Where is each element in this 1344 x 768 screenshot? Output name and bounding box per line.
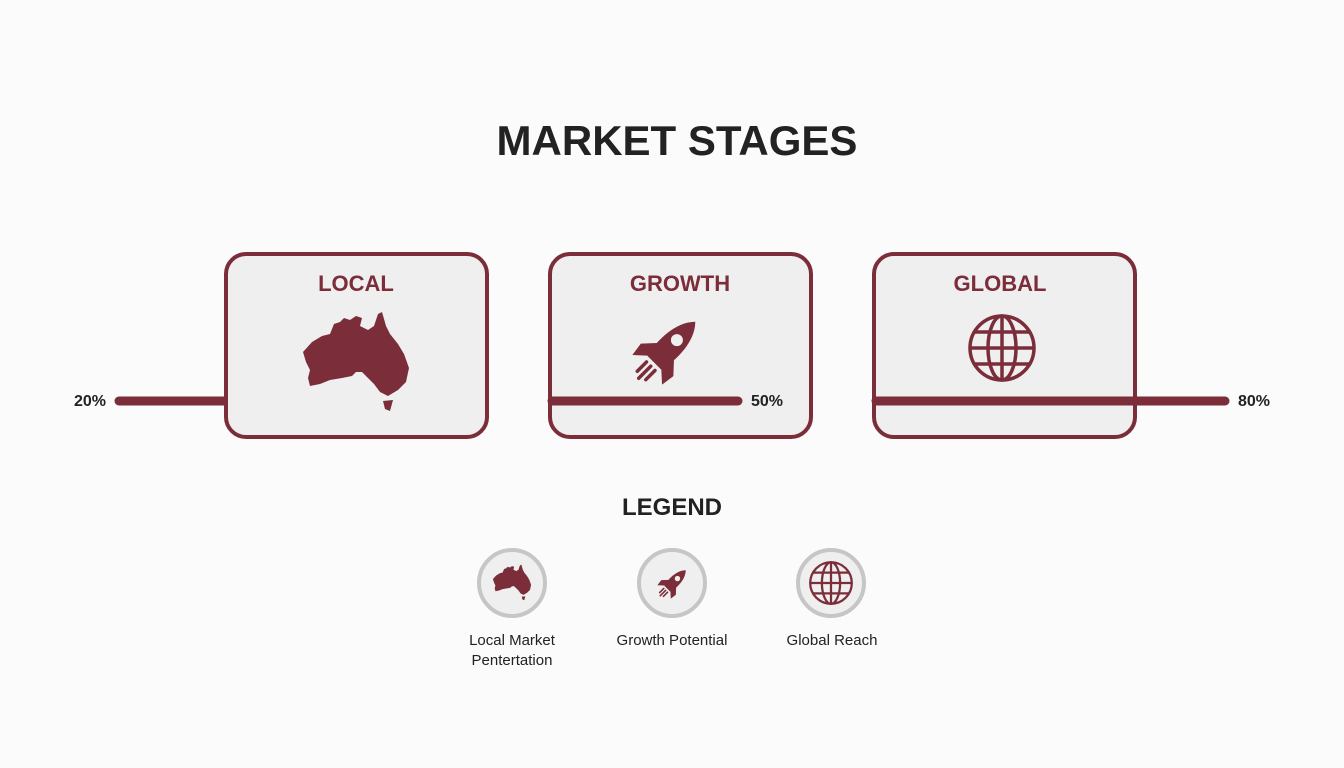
panel: global: GLOBAL (954, 271, 1046, 296)
panel: growth: 50% (751, 393, 783, 410)
legend item: growth: Growth Potential (617, 632, 727, 649)
panel: growth: GROWTH (630, 271, 730, 296)
legend item: local: Local Market (469, 632, 556, 649)
panel: global (874, 254, 1270, 437)
progress bar: local 20%: 20% (74, 393, 106, 410)
panel: growth (550, 254, 811, 437)
panel: local (226, 254, 487, 437)
legend heading: LEGEND (622, 494, 722, 521)
legend item: local: Pentertation (472, 652, 552, 669)
legend item: local (469, 550, 556, 669)
legend item: global (787, 550, 877, 649)
legend item: global: Global Reach (787, 632, 877, 649)
panel: global: 80% (1238, 393, 1270, 410)
panel: local: LOCAL (318, 271, 394, 296)
title: MARKET STAGES (497, 117, 857, 164)
legend item: growth (617, 550, 727, 649)
